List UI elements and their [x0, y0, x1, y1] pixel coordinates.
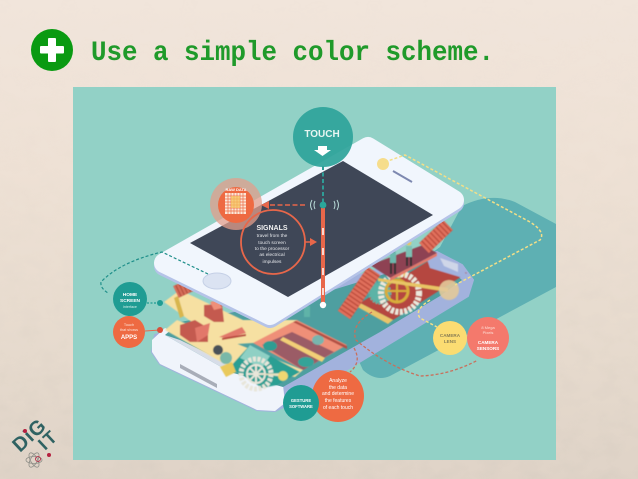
lower yellow deck	[165, 320, 303, 377]
figures	[304, 241, 412, 317]
touch bubble	[293, 107, 353, 167]
phone shadow	[340, 198, 556, 378]
phone upper shell	[164, 147, 454, 318]
camera sensors bubble: CAMERA	[478, 340, 499, 345]
logo: DIG IT	[8, 415, 62, 469]
signals callout: impulses	[263, 259, 282, 265]
analyze bubble: and determine	[322, 391, 354, 397]
signals callout: touch screen	[258, 240, 286, 246]
screen	[190, 161, 433, 297]
logo: DIG IT: IT	[34, 426, 62, 454]
signals callout: as electrical	[259, 252, 285, 258]
icon: green plus	[31, 29, 73, 71]
touch signal line	[310, 166, 338, 308]
apps bubble	[113, 316, 163, 348]
gesture software bubble: GESTURE	[291, 398, 311, 403]
tan camera module	[439, 280, 459, 300]
signals callout: to the processor	[255, 246, 290, 252]
home screen bubble: interface	[123, 305, 137, 309]
salmon room	[243, 320, 347, 370]
upper maroon floor	[370, 245, 437, 278]
home screen bubble	[113, 282, 163, 316]
camera lens bubble	[433, 321, 467, 355]
camera sensors bubble: 8 Mega	[481, 325, 495, 330]
raw data bubble: RAW DATA	[226, 187, 247, 192]
signals callout	[241, 210, 317, 274]
yellow dashed connector	[385, 155, 542, 327]
apps bubble: APPS	[121, 335, 137, 341]
analyze bubble: of each touch	[323, 405, 353, 411]
home screen dashed connector	[101, 252, 208, 293]
analyze bubble: the data	[329, 385, 347, 391]
apps bubble: that shows	[120, 328, 138, 332]
gesture software bubble	[283, 385, 319, 421]
camera dot	[377, 158, 389, 170]
analyze bubble	[312, 370, 364, 422]
home screen bubble: SCREEN	[120, 298, 141, 304]
logo: DIG IT: DiG	[8, 415, 51, 457]
teal gear	[370, 283, 390, 303]
speaker slot	[393, 171, 412, 182]
red dashed connector	[350, 312, 478, 376]
panel: phone infographic	[73, 87, 556, 460]
home screen bubble: HOME	[123, 292, 138, 298]
signals callout: travel from the	[257, 233, 288, 239]
camera lens bubble: LENS	[444, 339, 456, 344]
apps bubble: Touch	[124, 323, 134, 327]
signals callout: SIGNALS	[256, 225, 288, 232]
upper yellow plate	[164, 290, 297, 345]
interior: right room with gears	[304, 225, 470, 324]
gesture software bubble: SOFTWARE	[289, 404, 313, 409]
camera sensors bubble	[467, 317, 509, 359]
gear	[241, 359, 271, 389]
title: Use a simple color scheme.	[91, 38, 494, 69]
home button	[203, 273, 231, 289]
analyze bubble: the features	[325, 398, 352, 404]
analyze bubble: Analyze	[329, 378, 347, 384]
white gear	[381, 274, 419, 312]
camera sensors bubble: SENSORS	[477, 346, 499, 351]
teal gear room	[230, 345, 300, 388]
touch bubble: TOUCH	[304, 129, 340, 140]
stairs and red furniture	[176, 283, 195, 292]
phone lower body	[152, 252, 473, 411]
raw data bubble	[210, 178, 262, 230]
atom flower	[26, 451, 42, 469]
camera sensors bubble: Pixels	[483, 330, 493, 335]
raw data dashed arrow	[261, 201, 305, 209]
camera lens bubble: CAMERA	[440, 333, 461, 338]
interior: lower left floors	[164, 283, 347, 389]
stairs	[344, 271, 374, 315]
